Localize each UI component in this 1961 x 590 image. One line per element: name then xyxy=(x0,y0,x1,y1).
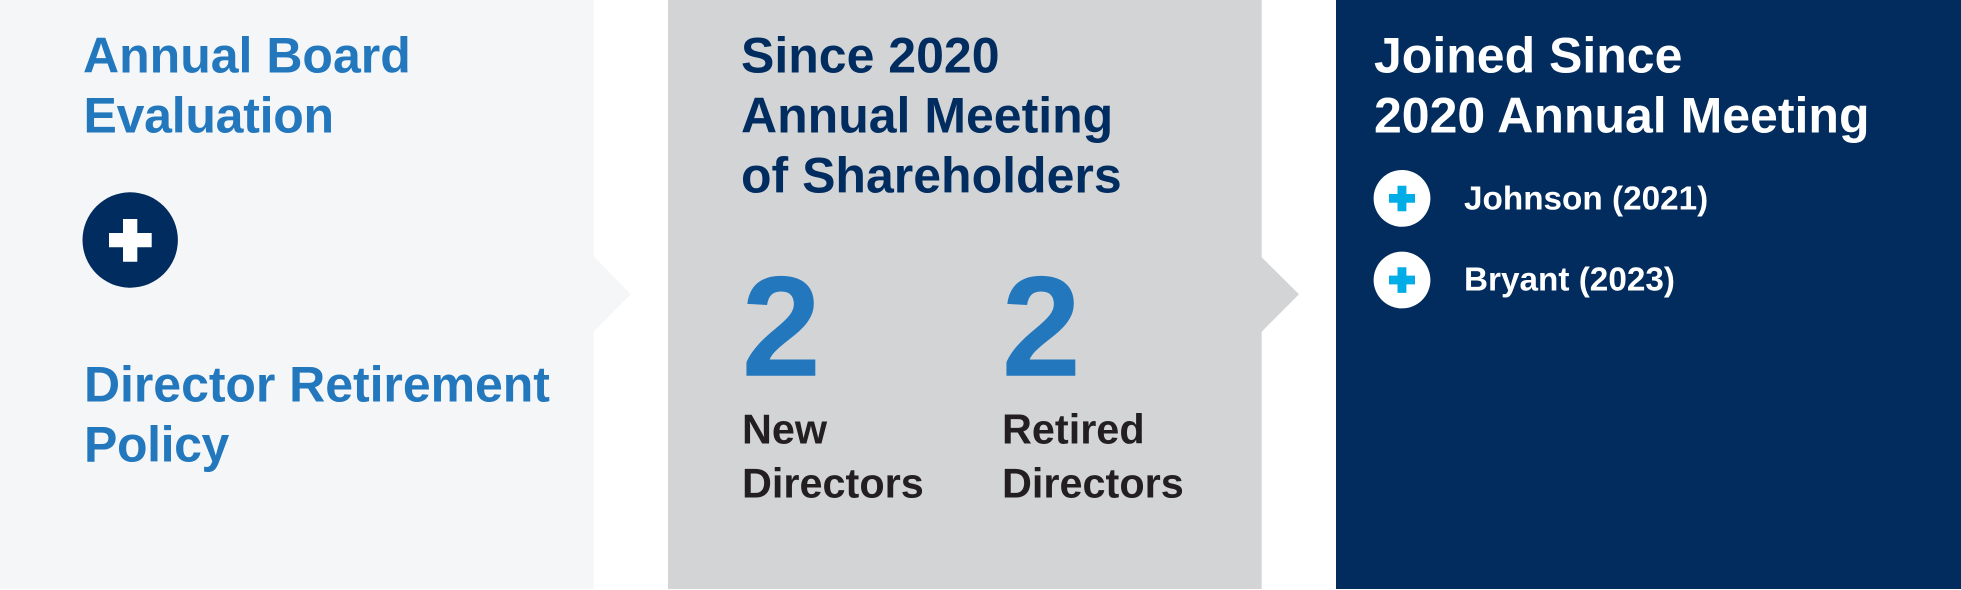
list item: bryant xyxy=(1374,252,1675,308)
heading: director retirement policy: Policy xyxy=(84,416,229,472)
stat: retired directors: Directors xyxy=(1002,460,1184,506)
heading: director retirement policy: Director Retirement xyxy=(84,356,550,412)
heading: annual board evaluation: Evaluation xyxy=(84,88,334,144)
heading: joined since 2020 annual meeting: Joined Since xyxy=(1374,28,1682,84)
heading: since 2020 annual meeting of shareholders: of Shareholders xyxy=(741,148,1122,204)
heading: since 2020 annual meeting of shareholders: Since 2020 xyxy=(741,28,1000,84)
panel background xyxy=(1336,0,1961,589)
panel: annual board evaluation and retirement policy xyxy=(0,0,631,589)
heading: since 2020 annual meeting of shareholders: Annual Meeting xyxy=(741,88,1113,144)
list item: johnson: Johnson (2021) xyxy=(1464,180,1708,217)
list item: bryant: Bryant (2023) xyxy=(1464,261,1675,298)
heading: annual board evaluation: Annual Board xyxy=(83,28,411,84)
stat: retired directors: 2 xyxy=(1002,248,1081,407)
stat: new directors: Directors xyxy=(742,460,924,506)
panel: since 2020 annual meeting xyxy=(668,0,1299,589)
stat: retired directors: Retired xyxy=(1002,406,1145,452)
icon: navy plus circle xyxy=(82,192,178,288)
list item: johnson xyxy=(1374,170,1708,227)
stat: retired directors xyxy=(1002,248,1184,506)
panel: joined since 2020 annual meeting xyxy=(1336,0,1961,589)
stat: new directors xyxy=(742,248,924,506)
panel background with arrow xyxy=(668,0,1299,589)
panel background with arrow xyxy=(0,0,631,589)
stat: new directors: New xyxy=(742,406,827,452)
stat: new directors: 2 xyxy=(742,248,821,407)
heading: joined since 2020 annual meeting: 2020 Annual Meeting xyxy=(1374,88,1869,144)
